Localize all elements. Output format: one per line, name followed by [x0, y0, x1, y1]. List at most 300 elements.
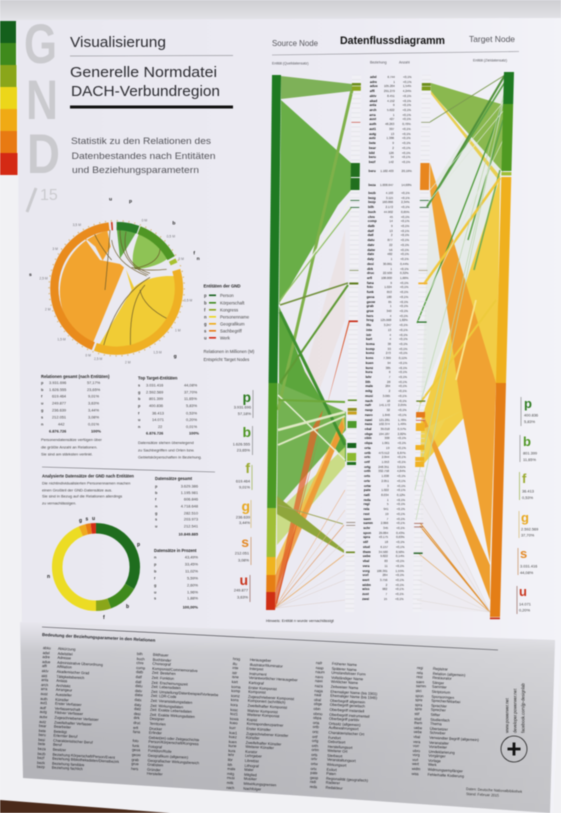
text: naum	[315, 670, 325, 675]
flow: b wedge	[277, 383, 346, 508]
relation numbers main: 194.187	[379, 432, 390, 436]
relation codes main: hers	[366, 314, 373, 318]
legend: Entitäten der GND: s	[204, 328, 207, 334]
legend: Entitäten der GND: Entitäten der GND	[204, 284, 241, 288]
text: Adelstitel	[58, 651, 73, 656]
text: Weiterer Künstler	[245, 745, 274, 750]
relation numbers main: 160.866	[382, 200, 393, 204]
chord: Personenname	[97, 269, 178, 351]
legend: Entitäten der GND: Relationen in Millionen (M)	[204, 349, 255, 354]
relation numbers main: 13	[389, 229, 393, 233]
relation shares main: <0,1%	[398, 389, 407, 393]
table: Datensätze gesamt: 1.195.981	[181, 490, 198, 495]
relation codes main: illu	[366, 323, 371, 327]
GND logotype: D	[27, 122, 60, 185]
target total: b: 11,65%	[523, 457, 536, 462]
relation numbers main: 284	[382, 573, 388, 577]
text: male	[227, 767, 235, 772]
relation codes main: desi	[367, 262, 374, 266]
text: Vorgänger	[428, 754, 446, 759]
relation codes main: kons	[366, 356, 373, 360]
relation numbers main: 300	[385, 436, 390, 440]
glossary column 4	[309, 661, 378, 791]
text: beru	[38, 733, 46, 738]
relation numbers main: 1	[391, 257, 392, 261]
text: uebe	[414, 730, 422, 735]
relation numbers main: 2.866	[381, 521, 388, 525]
relation codes top	[368, 75, 378, 164]
relation codes main: regi	[364, 502, 370, 506]
relation shares main: <0,1%	[399, 347, 408, 351]
legend: Entitäten der GND: g	[204, 322, 207, 326]
table: Relationen gesamt: 23,65%	[87, 387, 101, 392]
relation numbers main: 653	[387, 290, 392, 294]
relation codes top: bear	[369, 146, 376, 150]
text: Zeit: Exakte Wirkungsdaten	[150, 712, 195, 719]
text: Werk	[428, 763, 437, 768]
footer panel light falloff	[20, 622, 555, 813]
text: Stifter	[430, 713, 440, 717]
relation shares top: <0,1%	[403, 103, 411, 107]
relation shares main: <0,1%	[399, 333, 408, 337]
text: bete	[38, 742, 45, 747]
text: erfi	[133, 725, 138, 730]
relation shares main: 0,57%	[398, 427, 406, 431]
table: Top Target-Entitäten: zu Sachbegriffen und Orten bzw.	[138, 448, 194, 452]
table: Top Target-Entitäten: 5,83%	[186, 403, 198, 408]
flow: p to large node	[279, 100, 351, 305]
title: Generelle Normdatei	[70, 64, 217, 81]
relation numbers main: 28	[387, 380, 390, 384]
source total: g: 236.639	[236, 514, 250, 520]
relation numbers main: 941	[383, 507, 389, 511]
divider above dataset section	[42, 467, 215, 472]
source total: b: 23,65%	[237, 448, 251, 452]
relation codes main: obin	[365, 436, 372, 440]
target total: p: 400.836	[524, 412, 538, 418]
relation shares main: <0,1%	[400, 257, 409, 261]
relation codes main: naza	[365, 422, 372, 426]
text: Nachfolger	[243, 786, 261, 791]
text: samm	[416, 684, 426, 689]
relation shares main: <0,1%	[401, 191, 410, 195]
text: Buchbinder	[153, 657, 171, 662]
relation shares top: <0,1%	[403, 94, 411, 98]
relation numbers main: 13	[388, 328, 391, 332]
text: spon	[415, 694, 424, 698]
text: Zeit: Erscheinungszeit	[151, 680, 188, 686]
text: Kurator	[245, 750, 257, 754]
source total: f: f	[245, 460, 250, 476]
relation codes top: aust	[369, 117, 376, 121]
text: Sprachler	[431, 704, 447, 708]
chord segment labels: g	[174, 353, 177, 359]
relation shares top: <0,1%	[403, 75, 412, 79]
subtitle	[71, 136, 216, 175]
relation codes main: erfi	[367, 276, 372, 280]
flow: f olive band	[277, 496, 344, 553]
relation numbers main: 19	[385, 512, 388, 516]
text: Akademischer Grad	[57, 670, 89, 675]
relation shares main: <0,1%	[401, 196, 410, 200]
text: Bearbeiter	[54, 725, 71, 730]
text: Komponist	[248, 690, 266, 695]
relation numbers main: 7	[386, 592, 387, 596]
table: Relationen gesamt: Personendatensätze verfügen über	[41, 437, 102, 442]
target total: p	[521, 396, 538, 426]
text: besi	[38, 738, 45, 742]
relation shares main: 0,14%	[396, 554, 404, 558]
text: pate	[310, 771, 318, 775]
relation codes main: reda	[364, 498, 371, 502]
table: Relationen gesamt: 442	[58, 422, 64, 426]
source total: u: 3,63%	[237, 594, 249, 600]
text: wert	[412, 762, 419, 767]
text: Analysierte Datensätze	[42, 474, 134, 506]
text: ortx	[310, 767, 317, 771]
legend: Entitäten der GND: Werk	[220, 336, 231, 340]
donut labels: u	[92, 516, 95, 522]
flow: second orange band	[422, 412, 490, 600]
table: Relationen gesamt: 100%	[91, 428, 101, 434]
text: Librettist	[245, 759, 259, 763]
sankey header: Entität (Zieldatensatz)	[473, 58, 507, 62]
text: kune	[228, 744, 237, 749]
relation shares main: <0,1%	[399, 361, 407, 365]
relation numbers main: 3.065	[383, 394, 390, 398]
table: Relationen gesamt: 1.626.555	[49, 387, 66, 392]
relation numbers main: 1	[390, 266, 392, 270]
target total: g	[519, 510, 538, 538]
sankey header: Source Node	[272, 38, 318, 48]
donut: Körperschaft	[43, 514, 149, 620]
chord scale labels: 0 M	[178, 257, 184, 261]
relation numbers main: 102.374	[379, 422, 390, 426]
table: Top Target-Entitäten	[138, 376, 202, 460]
chord segment labels: b	[172, 220, 175, 226]
relation codes main: pate	[364, 488, 371, 492]
text: Lithograf	[244, 763, 259, 768]
target node totals	[517, 396, 538, 614]
table: Top Target-Entitäten: 801.399	[149, 396, 163, 401]
relation numbers top: 4.152	[387, 99, 395, 103]
text: obin	[313, 707, 321, 711]
text: nasp	[316, 666, 324, 670]
table: Top Target-Entitäten: 14.071	[152, 417, 164, 422]
text: Erster Komponist	[248, 685, 277, 691]
table: Top Target-Entitäten: 0,01%	[186, 424, 198, 429]
relation codes main: rest	[363, 512, 370, 516]
relation codes main: kunz	[366, 366, 373, 370]
relation codes main	[362, 191, 378, 601]
chord bundle	[93, 230, 168, 350]
text: naal	[314, 693, 321, 697]
text: Zeitweiser Name	[331, 685, 358, 690]
legend: Entitäten der GND: n	[204, 314, 207, 320]
relation codes main: wert	[362, 578, 369, 582]
sankey header: Beziehung	[370, 60, 387, 64]
relation codes main: them	[363, 550, 371, 554]
text: datv	[135, 689, 142, 693]
table: Relationen gesamt: 57,17%	[87, 380, 101, 385]
text: datu	[135, 684, 143, 688]
relation numbers main: 2.172	[385, 205, 393, 209]
donut: Werk	[53, 524, 139, 610]
relation codes main: datf	[368, 229, 374, 233]
chord scale labels: 2 M	[45, 308, 51, 312]
contact links: developer.powerwer.net	[512, 688, 518, 733]
footer rule	[42, 627, 498, 650]
relation numbers top: 307	[389, 127, 394, 131]
text: Beziehung Bibliotheksdaten/Dienstbezirk	[52, 757, 119, 764]
relation shares main: 1,66%	[400, 276, 409, 280]
table: Datensätze gesamt: 4.718.648	[181, 504, 198, 508]
flow: lower light wedge	[420, 410, 463, 467]
text: Zeit: Wirkungsdaten	[150, 703, 183, 709]
title: Visualisierung	[70, 35, 166, 51]
text: Beziehung Körperschaft/Person/Event	[52, 752, 115, 759]
text: bezf	[37, 756, 44, 760]
footer heading: Bedeutung der Beziehungsparameter in den Relationen	[42, 632, 156, 643]
table: Top Target-Entitäten: 37,70%	[184, 390, 198, 394]
relation codes main: ortw	[364, 484, 371, 488]
relation codes main: spra	[363, 535, 370, 539]
contact links	[504, 683, 526, 733]
relation shares main: <0,1%	[396, 559, 404, 563]
relation shares top: 4,24%	[403, 89, 411, 93]
text: orts	[311, 753, 318, 757]
relation numbers main: 1.038	[381, 474, 389, 478]
relation codes top: aktv	[370, 94, 376, 98]
donut chart	[43, 514, 149, 620]
relation numbers main: 2	[386, 583, 387, 587]
table: Top Target-Entitäten: 44,08%	[184, 382, 198, 388]
table: Datensätze in Prozent: f	[154, 576, 156, 580]
relation codes main: widm	[362, 583, 371, 587]
flow: green wedge	[431, 83, 504, 172]
text: ortw	[311, 762, 318, 766]
relation codes top: bete	[369, 141, 376, 145]
relation numbers main: 65	[388, 300, 392, 304]
text: koz1	[230, 712, 238, 716]
sankey note: Hinweis: Entität n wurde vernachlässigt	[266, 618, 335, 623]
source total: f	[236, 460, 252, 490]
text: aust	[40, 692, 48, 696]
table: Relationen gesamt: f	[41, 394, 43, 398]
relation numbers main: 39.018	[380, 427, 390, 431]
relation numbers main: 14	[389, 219, 393, 223]
relation codes top: autz	[369, 136, 376, 140]
donut labels: s	[86, 516, 88, 522]
relation numbers top: 2	[392, 146, 394, 150]
relation codes main: chre	[368, 215, 375, 219]
relation codes main: zwei	[362, 597, 369, 601]
chord scale labels: 3 M	[52, 247, 58, 251]
source total: b	[233, 424, 252, 455]
table: Relationen gesamt: n	[41, 422, 44, 426]
text: Künstler	[246, 736, 260, 741]
text: Abkürzung	[58, 647, 76, 652]
table: Top Target-Entitäten: p	[138, 403, 141, 408]
relation numbers main: 877	[387, 238, 393, 242]
relation numbers top: 6.744	[387, 75, 395, 79]
relation codes main: spon	[363, 531, 371, 535]
sankey header: Target Node	[469, 34, 515, 44]
relation codes top: beru	[369, 155, 376, 159]
text: geoa	[132, 748, 140, 753]
relation share: large two: 14,68%	[401, 183, 412, 187]
table: Relationen gesamt: 9,01%	[88, 394, 100, 398]
text: Korrespondenzpartner	[247, 722, 283, 728]
text: ortf	[312, 734, 318, 739]
relation codes main: hrsg	[366, 318, 374, 322]
text: Oberbegriff instantiell	[329, 708, 364, 713]
GND logotype	[24, 12, 60, 212]
text: Zugeschriebener Verfasser	[54, 716, 99, 722]
GND logotype: N	[26, 68, 58, 131]
relation number: large two: 1.008.647	[380, 183, 393, 187]
table: Top Target-Entitäten: 11,65%	[184, 396, 197, 401]
flow: orange band	[275, 420, 344, 592]
relation shares main: <0,1%	[399, 323, 408, 327]
relation codes main: kart	[366, 337, 372, 341]
relation shares top: <0,1%	[402, 141, 411, 145]
flows: target side	[415, 75, 505, 612]
relation codes main: navo	[365, 413, 373, 417]
relation shares main: <0,1%	[397, 479, 406, 483]
table: Relationen gesamt: 249.877	[52, 400, 66, 406]
table: Datensätze gesamt: 212.541	[184, 524, 198, 528]
text: Erlernter Beruf	[53, 734, 78, 739]
text: nawi	[315, 679, 323, 684]
relation shares main: <0,1%	[400, 304, 408, 308]
relation shares main: 6,87%	[397, 451, 406, 455]
text: spre	[415, 707, 422, 712]
relation numbers main: 1.846	[382, 413, 390, 417]
target total: b	[520, 434, 537, 462]
text: Oberbegriff genetisch	[330, 703, 365, 709]
relation shares top: <0,1%	[402, 155, 410, 159]
table: Top Target-Entitäten: 2.592.569	[146, 390, 163, 394]
text: Herausgeber	[250, 658, 271, 663]
target total: f	[520, 471, 534, 500]
source total: f: 9,01%	[239, 484, 251, 490]
relation shares top: <0,1%	[402, 150, 410, 154]
text: Sänger	[432, 681, 444, 685]
text: arra	[41, 687, 47, 692]
source total: u: 249.877	[234, 588, 248, 592]
text: Fiktiver Verfasser	[55, 711, 83, 716]
table: Top Target-Entitäten: f	[138, 410, 140, 416]
target total: u: 14.071	[519, 602, 531, 606]
relation numbers main: 5	[387, 502, 389, 506]
text: akti	[41, 674, 47, 678]
text: Architekt	[56, 683, 70, 688]
text: wiss	[411, 772, 419, 776]
text: Schreiber	[430, 731, 446, 736]
legend: Entitäten der GND: Körperschaft	[220, 300, 245, 306]
text: datx	[134, 698, 142, 702]
relation codes main: rela	[363, 507, 369, 511]
text: kosc	[230, 707, 238, 712]
relation codes top: bezf	[369, 160, 375, 164]
chord scale labels: 0,5 M	[167, 235, 175, 239]
text: Beziehung fachlich	[52, 766, 83, 772]
relation codes main: orta	[364, 446, 371, 450]
relation shares main: <0,1%	[395, 597, 404, 601]
chord segment labels: f	[193, 250, 195, 256]
text: desi	[134, 712, 141, 716]
relation shares top: <0,1%	[402, 136, 411, 140]
relation codes main: vorg	[363, 568, 370, 572]
relation shares main: <0,1%	[401, 238, 409, 242]
relation shares top: <0,1%	[402, 127, 411, 131]
donut: Personenname	[57, 528, 135, 606]
target total: g: 37,70%	[521, 532, 535, 538]
text: autz	[39, 719, 46, 724]
text: libr	[228, 758, 233, 762]
text: obpa	[313, 716, 321, 720]
table: Datensätze in Prozent: b	[154, 568, 157, 574]
text: comp	[136, 666, 145, 670]
source total: p	[234, 389, 253, 418]
text: chre	[136, 661, 144, 666]
relation shares main: <0,1%	[401, 215, 410, 219]
text: navo	[315, 675, 323, 679]
relation numbers main: 3.115	[386, 196, 393, 200]
relation codes main: buch	[368, 210, 376, 214]
relation codes main: dirk	[367, 266, 373, 270]
target total: p: p	[524, 396, 532, 411]
relation shares main: <0,1%	[397, 474, 406, 478]
relation shares main: <0,1%	[399, 370, 407, 374]
legend: Entitäten der GND: Sachbegriff	[220, 328, 242, 334]
relation numbers main: 482	[387, 252, 392, 256]
relation codes main: komp	[366, 347, 375, 351]
donut: Person	[57, 528, 135, 606]
relation numbers main: 121.281	[379, 418, 390, 422]
glossary column 2	[130, 652, 219, 777]
text: obge	[314, 702, 322, 707]
text: Tätigkeitsbereich	[56, 674, 84, 680]
relation codes main: mitg	[365, 389, 372, 393]
chord: Person	[117, 227, 137, 258]
donut: Sachbegriff	[49, 520, 143, 614]
relation numbers main: 1	[390, 304, 392, 308]
donut labels: b	[126, 604, 129, 610]
table: Relationen gesamt: p	[41, 380, 44, 385]
relation codes main: fana	[367, 281, 374, 285]
text: abku	[43, 646, 51, 650]
relation codes main: bilh	[368, 205, 374, 209]
text: them	[414, 721, 422, 725]
text: Zeit: LDR-Code	[151, 694, 176, 699]
relation shares main: <0,1%	[400, 285, 408, 289]
glossary column 3	[226, 657, 298, 792]
relation numbers main: 22.500	[383, 271, 392, 275]
relation shares main: 1,49%	[398, 422, 406, 426]
text: musi	[227, 776, 235, 781]
text: Geografikum (allgemein)	[148, 754, 188, 760]
relation numbers main: 9.822	[380, 554, 388, 558]
text: komz	[231, 694, 240, 698]
table: Relationen gesamt: 3,08%	[88, 414, 100, 420]
text: Zeit: Veranstaltungsdaten	[150, 699, 192, 705]
text: Skriptorium	[432, 690, 450, 695]
table: Relationen gesamt: 0,01%	[88, 422, 100, 426]
relation numbers main: 34.500	[379, 550, 388, 554]
relation numbers main: 22	[389, 243, 392, 247]
